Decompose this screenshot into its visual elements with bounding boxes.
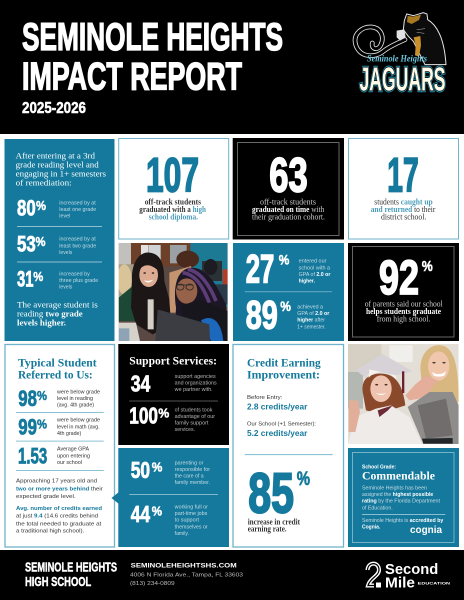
student credits text: Avg. number of credits earned (16, 506, 103, 512)
stat 27%: 27 (246, 247, 274, 291)
reading heading (16, 151, 106, 187)
logo: Seminole Heights Jaguars (355, 13, 446, 98)
panel: 92% of parents (348, 243, 459, 341)
stat 100%: 100 (129, 403, 158, 429)
panel: credit earning improvement (233, 344, 344, 547)
our school: 5.2 credits/year (247, 429, 307, 438)
student credits text: a traditional high school). (16, 529, 85, 535)
contact details: (813) 234-0809 (130, 581, 175, 587)
stat 50% (131, 457, 210, 486)
stat 80%: level (59, 214, 70, 220)
caption: their graduation cohort. (252, 213, 325, 222)
heading: Typical Student (18, 356, 97, 370)
panel: 17 returned: 17 (387, 149, 419, 203)
stat 31%: levels (59, 285, 73, 291)
stat 27%: higher. (299, 279, 316, 285)
stat 100%: % (158, 406, 170, 420)
stat 89%: 89 (246, 293, 278, 337)
contact details: 4006 N Florida Ave., Tampa, FL 33603 (130, 572, 243, 578)
reading heading: engaging in 1+ semesters (16, 169, 106, 178)
stat 99%: level in math (avg. (57, 424, 100, 430)
our school (247, 421, 316, 438)
title (22, 16, 283, 98)
before entry: Before Entry: (247, 395, 282, 401)
stat 89%: % (280, 298, 291, 314)
stat 98%: % (37, 388, 47, 403)
stat 80% (17, 196, 97, 221)
stat 27% (246, 247, 330, 291)
caption: off-track students (260, 198, 316, 207)
logo: Cognia: cognia (410, 525, 442, 536)
student age text: two or more years behind their (16, 486, 103, 492)
caption: school diploma. (149, 213, 198, 222)
photo: teacher and student at computer (117, 243, 228, 341)
grade description: rating by the Florida Department (362, 499, 441, 505)
logo: Second Mile Education: EDUCATION (418, 581, 450, 586)
stat 44%: to support (175, 518, 200, 524)
photo: graduate and mother (348, 344, 459, 444)
stat 98%: (avg. 4th grade) (57, 403, 94, 409)
grade description: assigned the highest possible (362, 492, 434, 498)
stat 80%: % (36, 198, 46, 213)
stat 85%: earning rate. (248, 525, 287, 534)
panel: support services (118, 344, 229, 445)
accreditation: Cognia. (362, 525, 381, 531)
reading summary: levels higher. (17, 318, 66, 327)
reading summary: The average student is (17, 300, 98, 309)
stat 50%: 50 (131, 457, 150, 483)
stat 99%: % (37, 417, 47, 432)
stat 27%: GPA of 2.0 or (299, 272, 330, 278)
stat 100% (129, 403, 215, 433)
stat 34: we partner with. (175, 387, 213, 393)
caption: graduated on time with (252, 205, 324, 214)
logo: Second Mile Education (368, 561, 450, 591)
stat 98% (18, 386, 100, 411)
stat 31% (17, 267, 99, 292)
stat 80%: 80 (17, 196, 36, 221)
title: IMPACT REPORT (22, 56, 242, 98)
stat 34: 34 (131, 371, 150, 397)
caption (371, 198, 436, 222)
stat 1.53 GPA: our school (57, 460, 82, 466)
reading summary (17, 300, 98, 327)
panel: 63 on time (233, 138, 344, 240)
stat 34: support agencies (175, 374, 216, 380)
stat 27%: entered our (299, 259, 327, 265)
heading: Credit Earning (247, 356, 321, 370)
stat 44%: working full or (175, 504, 208, 510)
contact details: SEMINOLEHEIGHTSHS.COM (131, 563, 237, 569)
heading: Improvement: (247, 367, 320, 381)
heading: Support Services: (129, 353, 217, 367)
stat 99%: 99 (18, 415, 37, 440)
stat 50%: family member. (175, 480, 210, 486)
caption (252, 198, 325, 222)
heading: Referred to Us: (18, 367, 93, 381)
heading (247, 356, 321, 381)
caption: students caught up (374, 198, 433, 207)
stat 27%: school with a (299, 265, 330, 271)
stat 89% (246, 293, 329, 337)
stat 80%: increased by at (59, 200, 96, 206)
stat 98%: level in reading (57, 396, 93, 402)
header band (0, 0, 464, 134)
caption: district school. (381, 213, 426, 222)
logo: Second Mile Education: Second (385, 561, 438, 578)
stat 89%: achieved a (297, 304, 323, 310)
stat 98%: were below grade (57, 389, 100, 395)
stat 31%: % (33, 269, 44, 284)
stat 85%: increase in credit (248, 517, 300, 526)
heading (18, 356, 97, 381)
stat 85%: % (297, 469, 310, 490)
panel: 92% of parents: % (422, 258, 433, 275)
stat 1.53 GPA: Average GPA (57, 447, 90, 453)
stat 100%: advantage of our (175, 414, 215, 420)
student credits text: the total needed to graduate at (16, 521, 102, 527)
grade description: Seminole Heights has been (362, 485, 427, 491)
stat 99%: were below grade (57, 418, 100, 424)
caption: and returned to their (371, 205, 436, 214)
stat 44%: 44 (131, 501, 150, 527)
panel: 17 returned (348, 138, 458, 239)
panel: 63 on time: 63 (269, 149, 308, 203)
stat 89%: GPA of 2.0 or (297, 311, 329, 317)
stat 1.53 GPA (18, 443, 90, 468)
reading heading: of remediation: (16, 178, 72, 187)
reading heading: After entering at a 3rd (16, 151, 95, 160)
school name: SEMINOLE HEIGHTS (25, 561, 117, 575)
stat 1.53 GPA: upon entering (57, 453, 90, 459)
stat 31%: three plus grade (59, 278, 99, 284)
stat 99% (18, 415, 100, 440)
before entry (247, 395, 307, 411)
stat 31%: 31 (17, 267, 34, 292)
grade description (362, 485, 441, 511)
accreditation: Seminole Heights is accredited by (362, 518, 444, 524)
before entry: 2.8 credits/year (247, 402, 307, 411)
student credits text (16, 506, 103, 535)
caption: helps students graduate (366, 307, 441, 316)
caption: from high school. (377, 314, 430, 323)
accreditation (362, 518, 444, 536)
stat 27%: % (279, 252, 290, 268)
stat 44%: part-time jobs (175, 511, 208, 517)
stat 80%: least one grade (59, 207, 97, 213)
logo: Second Mile Education: Mile (385, 574, 415, 591)
grade heading: School Grade: (362, 464, 396, 470)
panel: GPA improvement (233, 243, 344, 341)
student age text: expected grade level. (16, 494, 76, 500)
reading summary: reading two grade (17, 309, 83, 318)
stat 99%: 4th grade) (57, 431, 82, 437)
year: 2025-2026 (22, 100, 86, 117)
stat 44% (131, 501, 208, 537)
panel: 107 graduates (119, 138, 229, 239)
panel: student responsibilities (112, 448, 229, 547)
stat 44%: % (152, 504, 162, 518)
stat 31%: increased by (59, 271, 90, 277)
panel: school grade commendable (348, 448, 459, 547)
footer band (0, 550, 464, 600)
stat 89%: higher after (297, 318, 325, 324)
our school: Our School (+1 Semester): (247, 421, 316, 427)
caption: of parents said our school (365, 300, 443, 309)
panel: typical student (5, 344, 114, 547)
title: SEMINOLE HEIGHTS (22, 16, 283, 59)
stat 44%: family. (175, 531, 189, 537)
school name: HIGH SCHOOL (25, 575, 92, 589)
reading heading: grade reading level and (16, 160, 99, 169)
stat 50%: % (152, 460, 163, 474)
caption (365, 300, 443, 323)
stat 34 (131, 371, 217, 397)
caption (139, 198, 206, 222)
stat 100%: services. (175, 427, 195, 433)
panel: 92% of parents: 92 (379, 251, 419, 305)
stat 53%: % (36, 234, 46, 249)
student age text: Approaching 17 years old and (16, 479, 97, 485)
panel: reading gains (4, 139, 114, 341)
panel: 107 graduates: 107 (146, 149, 199, 203)
school name (25, 561, 117, 589)
stat 85%: 85 (248, 461, 294, 524)
stat 50%: the care of a (175, 473, 204, 479)
stat 98%: 98 (18, 386, 37, 411)
stat 50%: responsible for (175, 467, 210, 473)
stat 53%: 53 (17, 232, 36, 257)
stat 53%: levels (59, 250, 73, 256)
caption: off-track students (145, 198, 201, 207)
contact details (130, 563, 243, 587)
stat 34: and organizations (175, 381, 217, 387)
stat 53%: increased by at (59, 237, 96, 243)
caption: graduated with a high (139, 205, 206, 214)
logo: Seminole Heights Jaguars: Seminole Heights (367, 53, 427, 63)
stat 100%: of students took (175, 407, 213, 413)
student age text (16, 479, 103, 500)
student credits text: at just 9.4 (14.6 credits behind (16, 514, 98, 520)
stat 44%: themselves or (175, 524, 208, 530)
grade heading: Commendable (362, 468, 436, 482)
stat 89%: 1+ semester. (297, 324, 326, 330)
stat 53%: least two grade (59, 243, 97, 249)
grade description: of Education. (362, 505, 393, 511)
stat 50%: parenting or (175, 460, 204, 466)
stat 53% (17, 232, 97, 257)
stat 100%: family support (175, 420, 209, 426)
stat 1.53 GPA: 1.53 (18, 443, 47, 468)
